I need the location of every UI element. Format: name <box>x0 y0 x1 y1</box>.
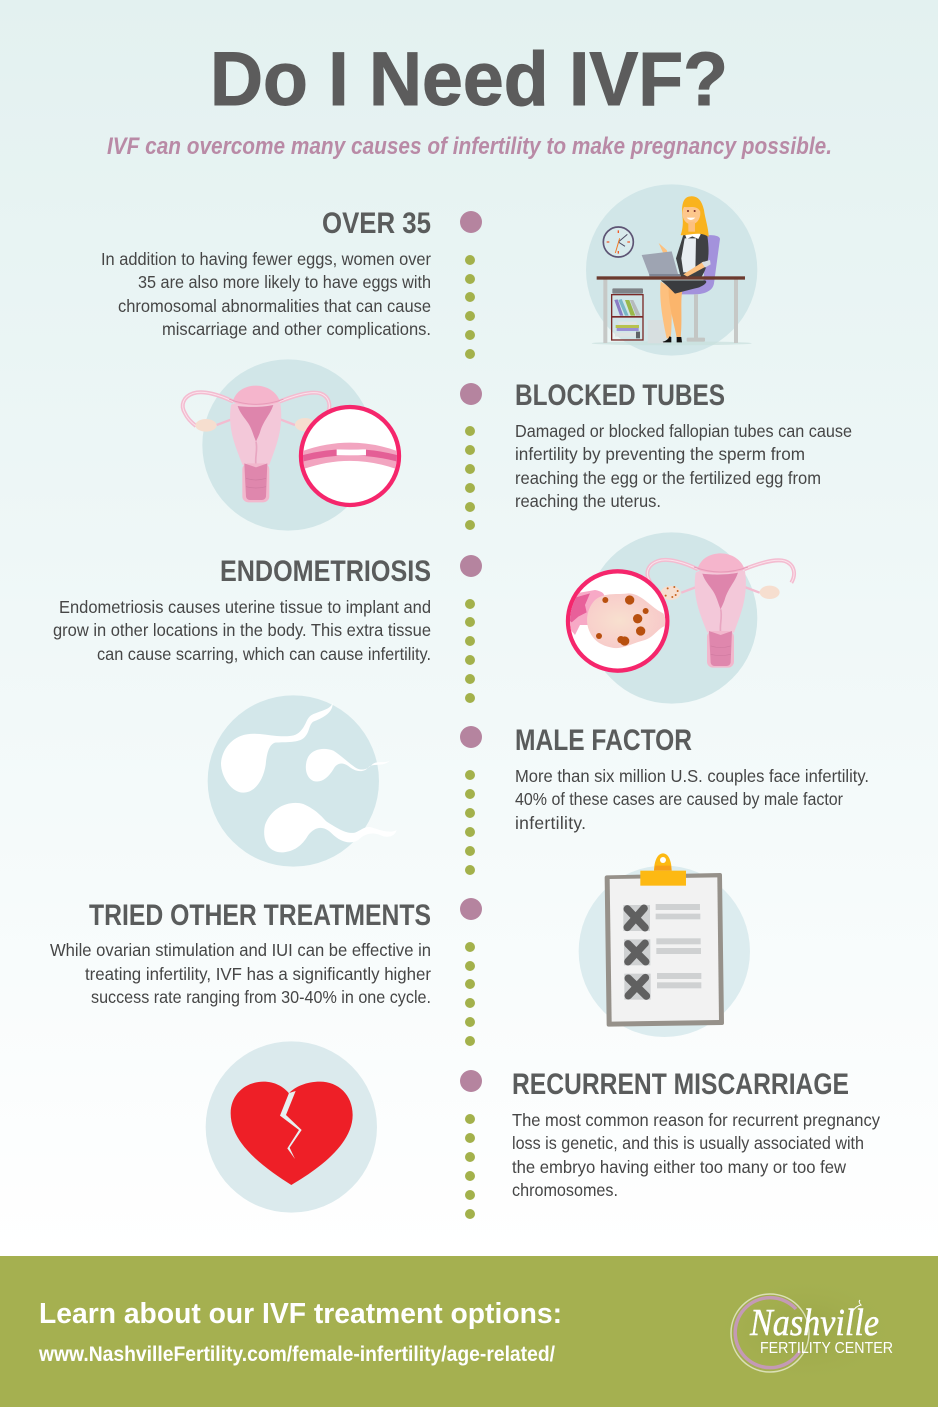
text: tried other treatments: success rate ranging from 30-40% in one cycle. <box>91 987 431 1007</box>
timeline <box>460 211 482 1219</box>
magnifier: blocked tube <box>297 407 403 505</box>
logo: FERTILITY CENTER <box>760 1340 893 1357</box>
icon: sperm <box>208 695 397 867</box>
text: over 35 <box>101 249 431 339</box>
text: male factor: infertility. <box>515 813 586 833</box>
text: tried other treatments <box>50 940 431 1007</box>
footer url: www.NashvilleFertility.com/female-infertility/age-related/ <box>38 1343 555 1366</box>
panel: over 35 <box>101 184 757 356</box>
magnifier: endometriosis <box>567 571 668 671</box>
panel: tried other treatments <box>50 853 750 1037</box>
text: tried other treatments: While ovarian stimulation and IUI can be effective in <box>50 940 431 960</box>
text: endometriosis <box>53 597 431 664</box>
text: blocked tubes: Damaged or blocked fallopian tubes can cause <box>515 421 852 441</box>
heading: blocked tubes: BLOCKED TUBES <box>515 379 725 412</box>
subtitle: IVF can overcome many causes of infertility to make pregnancy possible. <box>107 133 832 160</box>
panel: recurrent miscarriage <box>206 1041 880 1213</box>
text: recurrent miscarriage <box>512 1110 880 1200</box>
footer heading: Learn about our IVF treatment options: <box>39 1298 562 1330</box>
heading: tried other treatments: TRIED OTHER TREATMENTS <box>89 899 431 932</box>
text: recurrent miscarriage: The most common reason for recurrent pregnancy <box>512 1110 880 1130</box>
text: over 35: In addition to having fewer eggs, women over <box>101 249 431 269</box>
text: male factor: More than six million U.S. couples face infertility. <box>515 766 869 786</box>
text: endometriosis: Endometriosis causes uterine tissue to implant and <box>59 597 431 617</box>
text: over 35: miscarriage and other complications. <box>162 319 431 339</box>
text: recurrent miscarriage: chromosomes. <box>512 1180 618 1200</box>
heading: endometriosis: ENDOMETRIOSIS <box>220 555 431 588</box>
logo <box>710 1275 900 1385</box>
footer banner <box>0 1256 938 1407</box>
panel: blocked tubes <box>183 359 852 531</box>
heading: male factor: MALE FACTOR <box>515 724 692 757</box>
text: recurrent miscarriage: loss is genetic, and this is usually associated with <box>512 1133 864 1153</box>
icon: uterus with blocked tube <box>183 359 403 531</box>
icon: woman at desk <box>586 184 757 356</box>
text: blocked tubes <box>515 421 852 511</box>
text: endometriosis: grow in other locations in the body. This extra tissue <box>53 620 431 640</box>
panel: endometriosis <box>53 532 794 704</box>
heading: over 35: OVER 35 <box>322 207 431 240</box>
text: recurrent miscarriage: the embryo having either too many or too few <box>512 1157 846 1177</box>
icon: clock <box>603 227 633 257</box>
text: endometriosis: can cause scarring, which can cause infertility. <box>97 644 431 664</box>
text: tried other treatments: treating infertility, IVF has a significantly higher <box>85 964 431 984</box>
text: blocked tubes: reaching the egg or the fertilized egg from <box>515 468 821 488</box>
title: Do I Need IVF? <box>210 37 728 122</box>
icon: uterus with endometriosis <box>567 532 794 704</box>
text: male factor <box>515 766 869 833</box>
text: over 35: chromosomal abnormalities that can cause <box>118 296 431 316</box>
text: blocked tubes: reaching the uterus. <box>515 491 661 511</box>
heading: recurrent miscarriage: RECURRENT MISCARRIAGE <box>512 1068 849 1101</box>
text: male factor: 40% of these cases are caused by male factor <box>515 789 843 809</box>
text: over 35: 35 are also more likely to have eggs with <box>138 272 431 292</box>
logo: Nashville <box>749 1302 879 1344</box>
icon: clipboard <box>579 853 750 1037</box>
panel: male factor <box>208 695 869 867</box>
icon: broken heart <box>206 1041 377 1213</box>
text: blocked tubes: infertility by preventing the sperm from <box>515 444 805 464</box>
